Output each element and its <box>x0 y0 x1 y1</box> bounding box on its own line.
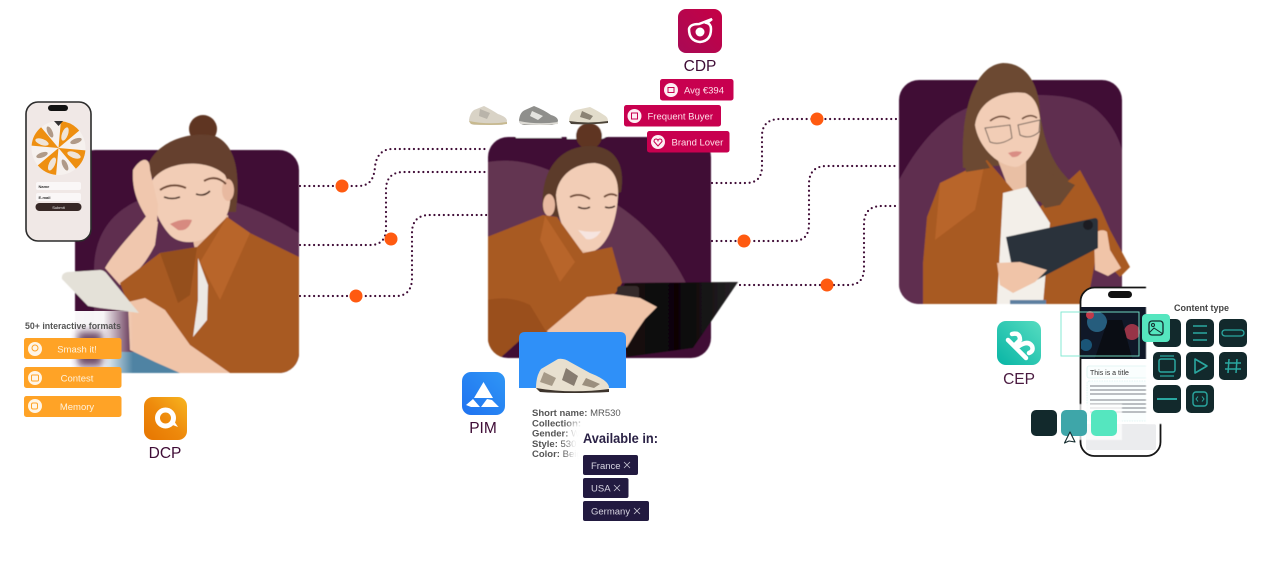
icon: DCP <box>144 397 187 440</box>
product details: Gender: W <box>532 429 580 440</box>
tile: image <box>1153 319 1181 347</box>
holding hand <box>547 294 657 358</box>
product: sneakers row <box>469 106 608 125</box>
sneaker 3 <box>569 107 608 124</box>
format: Smash it: Smash it! <box>57 344 97 356</box>
woman figure <box>100 115 299 373</box>
label: DCP: DCP <box>149 445 181 462</box>
format: Memory: Memory <box>60 402 94 413</box>
phone notch <box>1108 291 1132 298</box>
label: CDP: CDP <box>684 58 716 75</box>
image placeholder <box>1086 424 1156 450</box>
tile: video <box>1186 352 1214 380</box>
woman figure <box>923 63 1130 304</box>
background blob <box>94 192 299 373</box>
icon: CDP <box>678 9 722 53</box>
prize wheel <box>32 121 86 175</box>
availability heading: Available in: <box>583 431 658 446</box>
selection frame <box>1061 312 1139 356</box>
tile: hashtag <box>1219 352 1247 380</box>
connector lines: DCP to PIM <box>300 149 488 296</box>
product details <box>532 408 621 460</box>
tag: France: France <box>591 461 621 472</box>
tag: Brand Lover <box>647 131 730 152</box>
tag: USA: USA <box>591 484 611 494</box>
icon: PIM <box>462 372 505 415</box>
tablet <box>617 282 738 357</box>
phone notch <box>48 105 68 111</box>
frosted backdrop <box>15 311 133 426</box>
connector lines: PIM to CEP <box>712 119 899 285</box>
holding hand <box>997 262 1047 293</box>
panel: CEP woman with tablet <box>899 63 1130 304</box>
heading: content type: Content type <box>1174 303 1229 313</box>
email field: E-mail <box>38 195 51 200</box>
phone body <box>26 102 91 241</box>
tag: Frequent Buyer <box>624 105 721 126</box>
tag: Avg spend <box>660 79 734 100</box>
icon: cursor <box>1064 432 1075 443</box>
title field <box>1087 366 1157 378</box>
phone: spin the wheel game <box>26 102 91 241</box>
content type backdrop <box>1146 285 1256 424</box>
phone body <box>1080 288 1160 456</box>
frosted card <box>570 421 686 529</box>
tag: Frequent Buyer: Frequent Buyer <box>648 112 713 122</box>
panel: interactive formats <box>15 311 133 426</box>
panel: PIM woman with tablet <box>487 123 738 358</box>
woman figure <box>487 123 622 358</box>
panel background <box>75 150 299 373</box>
grid: content type tiles <box>1153 319 1247 413</box>
blurred panel behind card <box>78 332 102 366</box>
name field: Name <box>38 184 50 189</box>
tile: carousel <box>1153 352 1181 380</box>
background blob <box>488 161 686 283</box>
formats heading: 50+ interactive formats <box>25 321 121 331</box>
sneaker <box>536 359 609 393</box>
top edge notches <box>514 131 607 139</box>
swatch: teal <box>1061 410 1087 436</box>
panel background <box>488 137 711 358</box>
product details: Short name: MR530 <box>532 408 621 419</box>
submit button: Submit <box>52 205 66 210</box>
tile: divider <box>1153 385 1181 413</box>
panel: availability <box>570 421 686 529</box>
sneaker 1 <box>469 106 507 125</box>
tag: Brand Lover: Brand Lover <box>672 138 723 148</box>
background blob <box>899 95 1122 304</box>
swatch: dark <box>1031 410 1057 436</box>
tag: Germany: Germany <box>591 506 630 518</box>
product details: Color: Beige <box>532 449 587 460</box>
product details: Collection: <box>532 418 581 429</box>
product card: blue header with sneaker <box>519 332 626 393</box>
tablet <box>1006 218 1098 285</box>
phone: content editor <box>1080 288 1161 456</box>
title field: This is a title <box>1090 370 1129 377</box>
tile: button <box>1219 319 1247 347</box>
tile: active image <box>1142 314 1170 342</box>
handheld phone <box>62 270 139 313</box>
tile: code <box>1186 385 1214 413</box>
colour swatches <box>1026 404 1122 440</box>
panel background <box>899 80 1122 304</box>
label: PIM: PIM <box>469 420 497 437</box>
tag: Avg spend: Avg €394 <box>684 86 724 96</box>
format: Contest: Contest <box>61 374 94 384</box>
connector node dots <box>336 112 834 302</box>
sneaker 2 <box>519 106 558 125</box>
hero image <box>1081 307 1147 359</box>
icon: CEP <box>997 321 1041 365</box>
handheld phone <box>617 286 639 299</box>
swatch: mint <box>1091 410 1117 436</box>
panel: DCP woman with phone <box>62 115 299 373</box>
product details: Style: 530 <box>532 439 576 450</box>
label: CEP: CEP <box>1003 371 1035 388</box>
tile: text <box>1186 319 1214 347</box>
body text field <box>1087 381 1157 421</box>
